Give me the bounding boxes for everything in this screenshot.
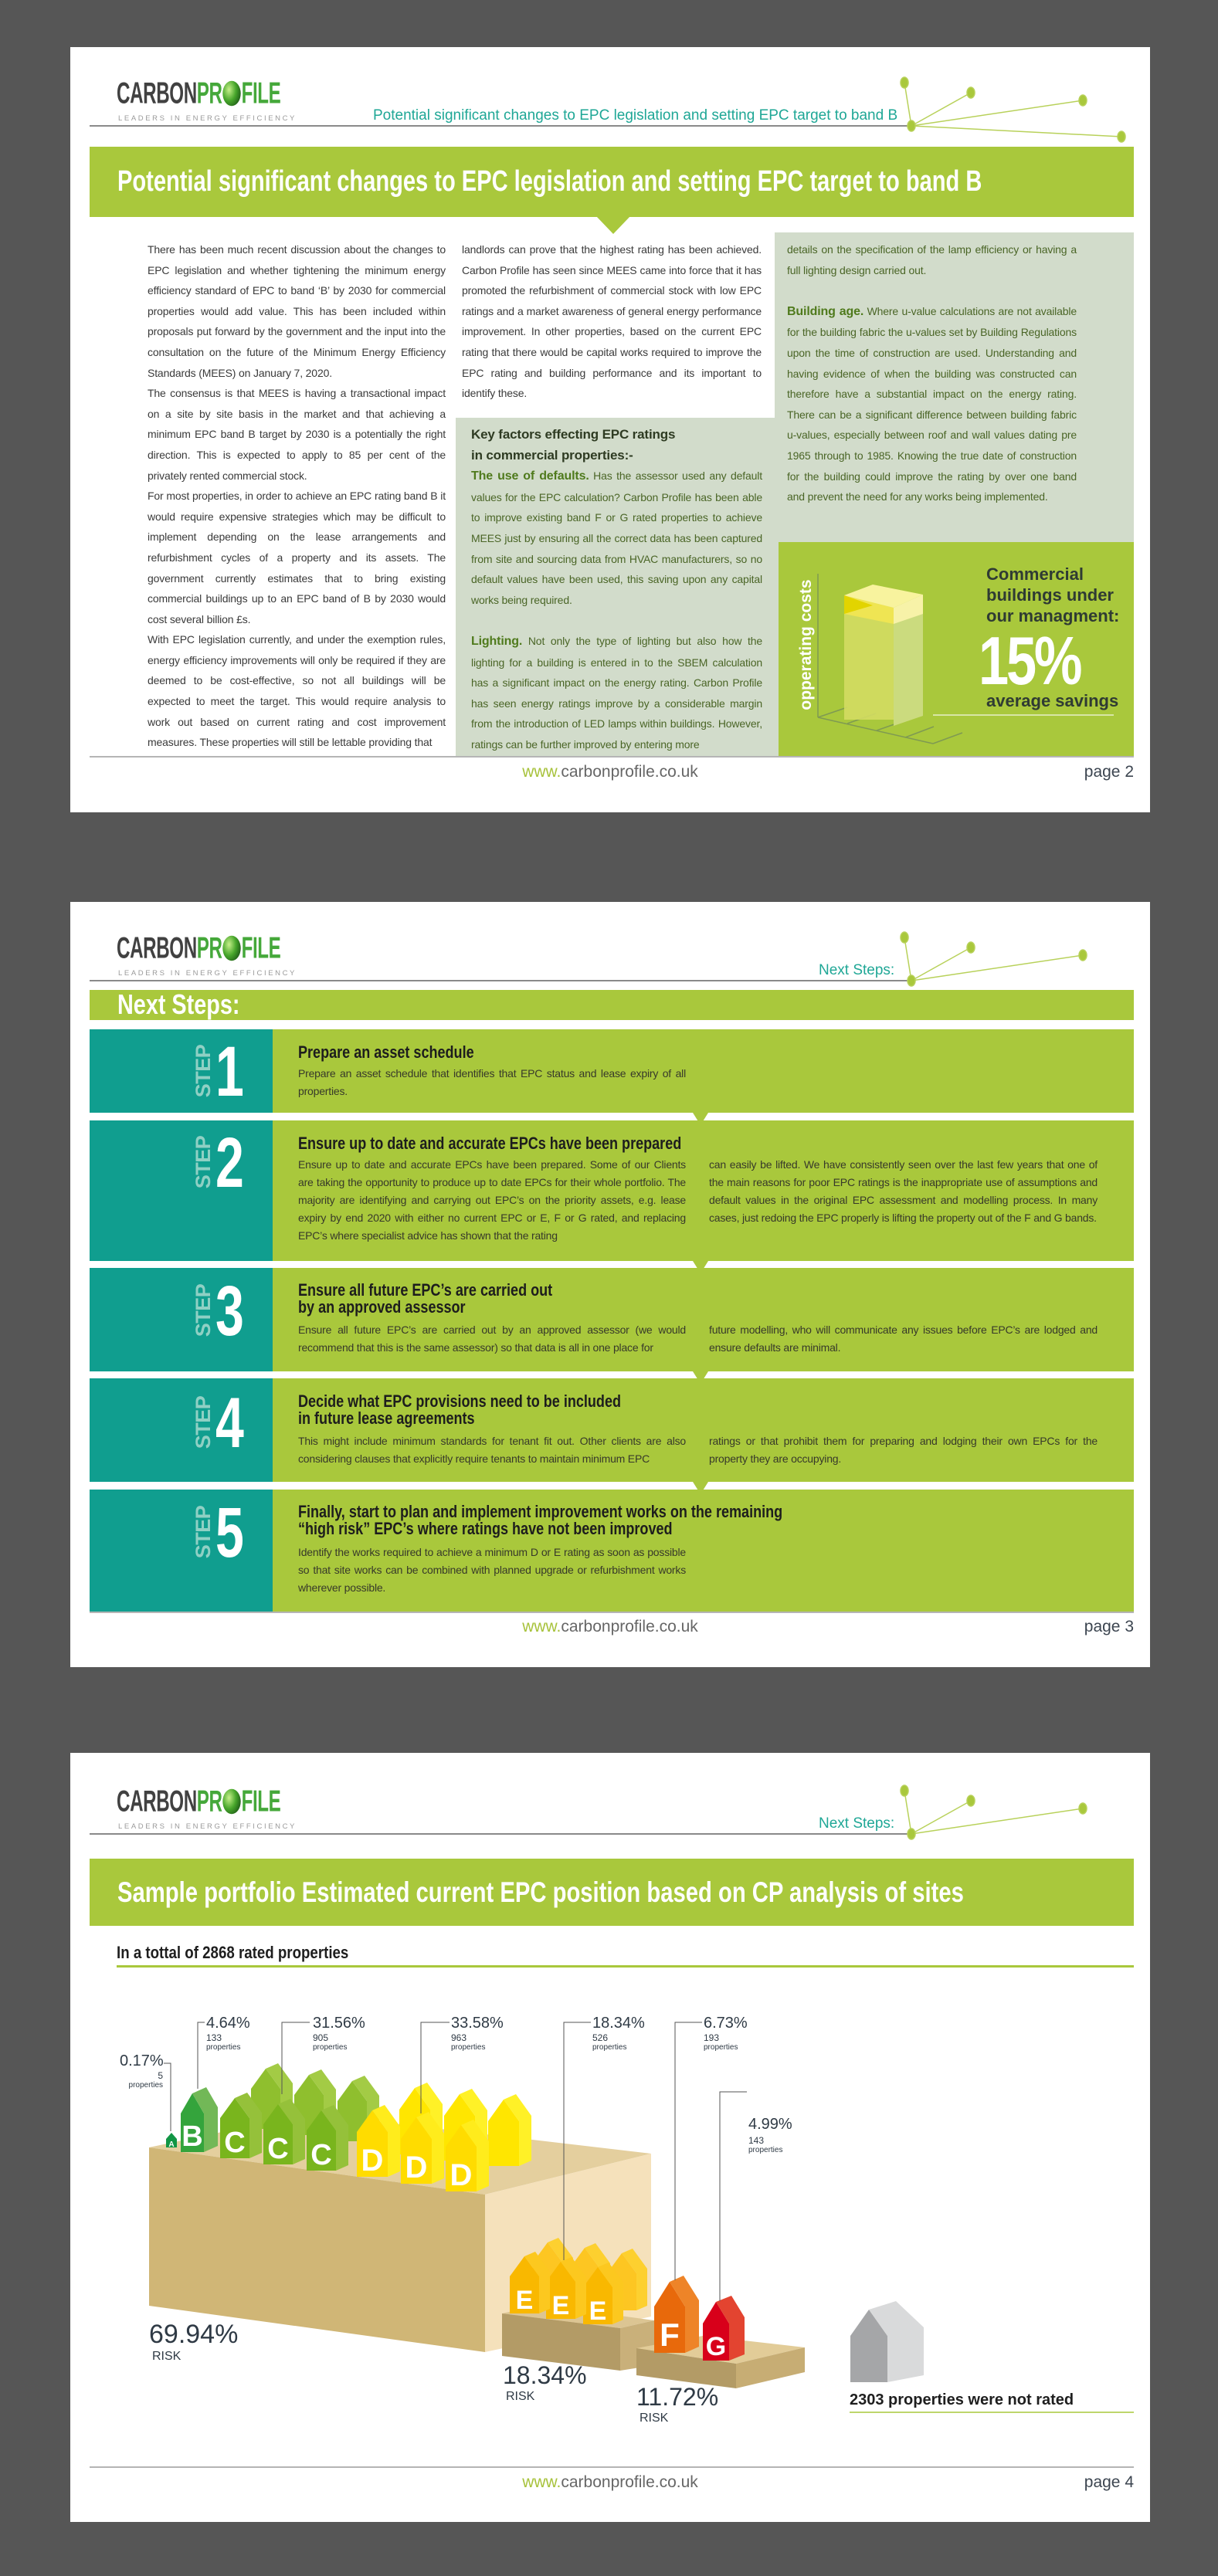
title banner: Sample portfolio Estimated current EPC position based on CP analysis of sites: [117, 1876, 964, 1908]
step 3: 3: [215, 1272, 244, 1351]
icon: network dots: [900, 931, 1087, 987]
text block: column 1: For most properties, in order to achieve an EPC rating band B it would require expensive strategies which may be difficult to implement depending on the lease arrangements and refurbishment cycles of a property and its assets. The government currently estimates that to bring existing commercial buildings up to an EPC band of B by 2030 would cost several billion £s.: [148, 490, 446, 625]
text block: column 3: details on the specification of the lamp efficiency or having a full lighting design carried out.: [787, 243, 1077, 276]
callout: 15% average savings: [779, 542, 1134, 756]
page 2 card: [70, 47, 1150, 812]
houses A-D: C: [267, 2133, 289, 2165]
percentage labels: 4.99%: [748, 2116, 792, 2133]
percentage labels: RISK: [640, 2412, 669, 2425]
step 1: STEP: [192, 1045, 215, 1097]
logo: [117, 931, 297, 978]
text: commercial buildings: buildings under: [986, 585, 1114, 605]
logo: LEADERS IN ENERGY EFFICIENCY: [118, 1822, 297, 1831]
E box and houses: E: [516, 2286, 533, 2315]
step 4: Decide what EPC provisions need to be included: [298, 1391, 621, 1411]
logo: [117, 1784, 297, 1831]
houses A-D: C: [224, 2127, 246, 2159]
percentage labels: 18.34%: [503, 2361, 587, 2389]
page number: page 3: [1084, 1618, 1134, 1635]
footer url: www.carbonprofile.co.uk: [522, 1618, 698, 1635]
icon: network dots: [900, 1785, 1087, 1840]
page 4 card: [70, 1753, 1150, 2522]
logo: CARBONPR FILE: [117, 1784, 280, 1818]
text block: key factors: Key factors effecting EPC ratings: [471, 427, 675, 442]
houses A-D: C: [310, 2139, 332, 2171]
F G box and houses: F: [660, 2317, 680, 2353]
title banner: [90, 990, 1134, 1020]
step 3: by an approved assessor: [298, 1297, 466, 1317]
chart: operating costs bar: [797, 574, 1114, 744]
step 3: STEP: [192, 1284, 215, 1337]
text block: key factors: in commercial properties:-: [471, 448, 633, 463]
logo: LEADERS IN ENERGY EFFICIENCY: [118, 969, 297, 978]
footer url: www.carbonprofile.co.uk: [522, 763, 698, 781]
step 5: 5: [215, 1493, 244, 1572]
percentage labels: 963: [451, 2032, 467, 2043]
step 4: 4: [215, 1384, 244, 1463]
F G box and houses: [636, 2276, 805, 2388]
step 4: ratings or that prohibit them for preparing and lodging their own EPCs for the property they are occupying.: [709, 1435, 1098, 1465]
step 5: “high risk” EPC’s where ratings have not been improved: [298, 1519, 673, 1538]
step 4: in future lease agreements: [298, 1408, 475, 1428]
percentage labels: properties: [206, 2043, 240, 2052]
text: average savings: average savings: [986, 691, 1118, 710]
text block: column 1: There has been much recent discussion about the changes to EPC legislation and whether tightening the minimum energy efficiency standard of EPC to band ‘B’ by 2030 for commercial properties would add value. This has been included within proposals put forward by the government and the input into the consultation on the future of the Minimum Energy Efficiency Standards (MEES) on January 7, 2020.: [148, 243, 446, 379]
percentage labels: 69.94%: [149, 2320, 238, 2349]
text: commercial buildings: [986, 564, 1119, 625]
percentage labels: 905: [313, 2032, 328, 2043]
title banner: [90, 1859, 1134, 1926]
page 3 card: [70, 902, 1150, 1667]
arrow: [693, 1261, 708, 1273]
percentage labels: properties: [592, 2043, 626, 2052]
step 2: [90, 1120, 1134, 1261]
logo: [117, 76, 297, 123]
step 3: future modelling, who will communicate any issues before EPC’s are lodged and ensure defaults are minimal.: [709, 1324, 1098, 1354]
text: commercial buildings: Commercial: [986, 564, 1084, 584]
text block: column 1: The consensus is that MEES is having a transactional impact on a site by site basis in the market and that achieving a minimum EPC band B target by 2030 is a potentially the right direction. This is expected to apply to 85 per cent of the privately rented commercial stock.: [148, 387, 446, 482]
percentage labels: RISK: [506, 2390, 535, 2403]
percentage labels: 133: [206, 2032, 222, 2043]
percentage labels: 193: [704, 2032, 719, 2043]
chart: operating costs bar: opperating costs: [797, 579, 815, 710]
step 3: Ensure all future EPC’s are carried out by an approved assessor (we would recommend that this is the same assessor) so that data is all in one place for: [298, 1324, 686, 1354]
title banner: [90, 147, 1134, 217]
percentage labels: 4.64%: [206, 2015, 250, 2032]
houses A-D: B: [182, 2120, 203, 2153]
logo: CARBONPR FILE: [117, 931, 280, 964]
E box and houses: [502, 2238, 654, 2371]
percentage labels: 18.34%: [592, 2015, 645, 2032]
step 2: 2: [215, 1124, 244, 1202]
step 3: [90, 1268, 1134, 1371]
text: 15%: 15%: [979, 622, 1080, 699]
percentage labels: [120, 2015, 792, 2425]
percentage labels: 6.73%: [704, 2015, 748, 2032]
percentage labels: properties: [313, 2043, 347, 2052]
percentage labels: 0.17%: [120, 2052, 164, 2069]
text block: column 3: Building age. Where u-value calculations are not available for the building fabric the u-values set by Building Regulations upon the time of construction are used. Understanding and having evidence of when the building was constructed can therefore have a substantial impact on the energy rating. There can be a significant difference between building fabric u-values, especially between roof and wall values dating pre 1965 through to 1985. Knowing the true date of construction for the building could improve the rating by over one band and prevent the need for any works being implemented.: [787, 305, 1077, 503]
percentage labels: 526: [592, 2032, 608, 2043]
arrow: [693, 1113, 708, 1125]
step 5: Finally, start to plan and implement improvement works on the remaining: [298, 1502, 782, 1521]
percentage labels: 143: [748, 2135, 764, 2146]
step 5: STEP: [192, 1506, 215, 1558]
chart: EPC houses: [120, 2015, 1134, 2425]
step 4: This might include minimum standards for tenant fit out. Other clients are also considering clauses that explicitly require tenants to maintain minimum EPC: [298, 1435, 686, 1465]
text: not rated: 2303 properties were not rated: [850, 2391, 1074, 2408]
arrow: [693, 1482, 708, 1494]
arrow: [693, 1371, 708, 1384]
icon: unrated grey house: [850, 2301, 924, 2382]
percentage labels: properties: [451, 2043, 485, 2052]
step 5: [90, 1490, 1134, 1612]
percentage labels: properties: [704, 2043, 738, 2052]
title banner: Potential significant changes to EPC legislation and setting EPC target to band B: [117, 165, 982, 198]
text block: column 2: landlords can prove that the highest rating has been achieved. Carbon Profile has seen since MEES came into force that it has promoted the refurbishment of commercial stock with low EPC ratings and a market awareness of general energy performance improvement. In other properties, based on the current EPC rating that there would be capital works required to improve the EPC rating and building performance and its important to identify these.: [462, 243, 762, 399]
percentage labels: RISK: [152, 2350, 182, 2363]
header label: Next Steps:: [819, 1815, 894, 1832]
step 1: 1: [215, 1032, 244, 1111]
percentage labels: 31.56%: [313, 2015, 365, 2032]
step 1: Prepare an asset schedule: [298, 1042, 474, 1062]
E box and houses: E: [552, 2291, 569, 2320]
houses A-D: A: [168, 2140, 175, 2149]
step 2: Ensure up to date and accurate EPCs have been prepared: [298, 1134, 681, 1153]
step 4: [90, 1378, 1134, 1482]
header label: Next Steps:: [819, 962, 894, 978]
header subtitle: Potential significant changes to EPC legislation and setting EPC target to band B: [373, 107, 897, 124]
houses A-D: D: [405, 2151, 427, 2185]
logo: CARBONPR FILE: [117, 76, 280, 110]
text: commercial buildings: our managment:: [986, 606, 1119, 625]
houses A-D: [166, 2063, 531, 2192]
percentage labels: properties: [748, 2146, 782, 2154]
banner pointer: [596, 216, 630, 234]
houses A-D: D: [361, 2144, 383, 2178]
E box and houses: E: [589, 2296, 606, 2326]
subheading: In a tottal of 2868 rated properties: [117, 1943, 348, 1962]
leader lines: [164, 2022, 747, 2301]
text block: column 1: [148, 243, 446, 748]
percentage labels: properties: [129, 2081, 163, 2090]
step 2: STEP: [192, 1136, 215, 1188]
step 1: Prepare an asset schedule that identifies that EPC status and lease expiry of all properties.: [298, 1067, 686, 1097]
percentage labels: 33.58%: [451, 2015, 504, 2032]
panel: key factors box background: [456, 418, 775, 756]
icon: network dots: [900, 76, 1126, 143]
page number: page 4: [1084, 2473, 1134, 2491]
step 2: can easily be lifted. We have consistently seen over the last few years that one of the main reasons for poor EPC ratings is the inappropriate use of assumptions and default values in the original EPC assessment and modelling process. In many cases, just redoing the EPC properly is lifting the property out of the F and G bands.: [709, 1158, 1098, 1224]
big box: [149, 2113, 651, 2352]
text block: key factors: [471, 427, 763, 751]
page number: page 2: [1084, 763, 1134, 781]
step 2: Ensure up to date and accurate EPCs have been prepared. Some of our Clients are taking the opportunity to produce up to date EPCs for their whole portfolio. The majority are identifying and carrying out EPC’s on the priority assets, e.g. lease expiry by end 2020 with either no current EPC or E, F or G rated, and replacing EPC’s where specialist advice has shown that the rating: [298, 1158, 686, 1242]
percentage labels: 11.72%: [636, 2383, 718, 2411]
footer url: www.carbonprofile.co.uk: [522, 2473, 698, 2491]
text block: column 1: With EPC legislation currently, and under the exemption rules, energy efficiency improvements will only be required if they are deemed to be cost-effective, so not all buildings will be expected to meet the target. This would require analysis to work out based on current rating and cost improvement measures. These properties will still be lettable providing that: [148, 633, 446, 748]
logo: LEADERS IN ENERGY EFFICIENCY: [118, 114, 297, 123]
percentage labels: 5: [158, 2070, 163, 2081]
step 1: [90, 1029, 1134, 1113]
F G box and houses: G: [706, 2332, 726, 2361]
text block: key factors: Lighting. Not only the type of lighting but also how the lighting for a building is entered in to the SBEM calculation has a significant impact on the energy rating. Carbon Profile has seen energy ratings improve by a considerable margin from the introduction of LED lamps within buildings. However, ratings can be further improved by entering more: [471, 635, 762, 751]
step 5: Identify the works required to achieve a minimum D or E rating as soon as possible so that site works can be combined with planned upgrade or refurbishment works wherever possible.: [298, 1546, 686, 1594]
houses A-D: D: [450, 2158, 472, 2192]
step 3: Ensure all future EPC’s are carried out: [298, 1280, 552, 1300]
title banner: Next Steps:: [117, 988, 239, 1020]
text block: key factors: The use of defaults. Has the assessor used any default values for the EPC calculation? Carbon Profile has been able to improve existing band F or G rated properties to achieve MEES just by ensuring all the correct data has been captured from site and sourcing data from HVAC manufacturers, so no default values have been used, this saving upon any capital works being required.: [471, 469, 762, 606]
step 4: STEP: [192, 1396, 215, 1449]
panel: right column box background: [775, 232, 1134, 756]
